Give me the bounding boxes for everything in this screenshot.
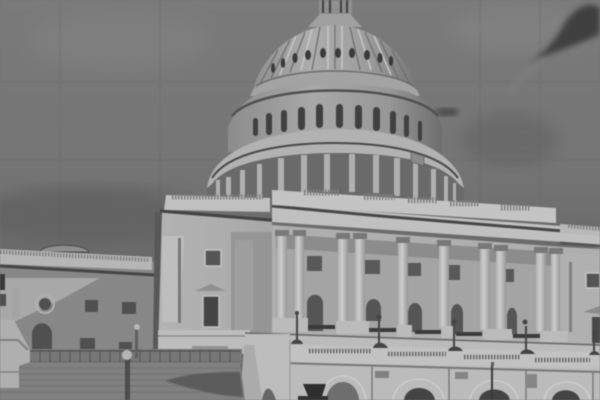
portico recess bbox=[276, 234, 556, 338]
wing cornice bbox=[0, 266, 155, 275]
dome base band bbox=[250, 69, 420, 96]
steps bbox=[0, 362, 245, 400]
central left balustrade bbox=[164, 195, 270, 212]
dome oval windows bbox=[271, 48, 393, 73]
pilasters bbox=[162, 236, 184, 322]
left edge shadow bbox=[153, 212, 162, 352]
ground floor arches bbox=[320, 362, 593, 400]
dome ribs highlight bbox=[280, 26, 391, 75]
step shadow bbox=[165, 372, 243, 397]
portico windows bbox=[307, 256, 514, 282]
wing pilaster bbox=[12, 288, 20, 318]
portico columns bbox=[272, 230, 568, 342]
portico wall bbox=[272, 225, 600, 350]
wing lit wall bbox=[0, 278, 100, 322]
terrace bbox=[245, 333, 600, 400]
central block left bay bbox=[153, 212, 276, 354]
peristyle ring bbox=[207, 129, 464, 205]
stair lamp post bbox=[122, 324, 140, 400]
right wing wall bbox=[563, 252, 600, 350]
foreground lamp bbox=[298, 384, 328, 400]
wing windows bbox=[0, 294, 136, 364]
entablature bbox=[160, 204, 600, 248]
wing small dome bbox=[40, 245, 89, 252]
right wing balustrade bbox=[560, 224, 600, 236]
dark cloud bbox=[435, 5, 600, 116]
peristyle columns bbox=[216, 154, 456, 203]
iron fence bbox=[30, 349, 242, 364]
foliage at left edge bbox=[0, 274, 5, 290]
left pedestal bbox=[0, 320, 30, 388]
shaded bay bbox=[231, 232, 276, 334]
lower balustrade bbox=[245, 344, 600, 372]
left wing bbox=[0, 245, 170, 364]
flag bbox=[411, 152, 424, 166]
front pier bbox=[240, 334, 290, 400]
upper drum with arched windows bbox=[228, 84, 442, 152]
dome lantern bbox=[308, 0, 362, 27]
terrace lamps bbox=[291, 311, 600, 355]
portico arches bbox=[307, 295, 517, 334]
window pedimented bbox=[203, 296, 219, 327]
main balustrade bbox=[272, 190, 556, 223]
upper dome bbox=[250, 25, 420, 96]
dome ribs bbox=[260, 25, 410, 84]
portico railings bbox=[307, 327, 540, 336]
column capitals bbox=[275, 230, 563, 254]
recess upper shadow bbox=[276, 234, 556, 266]
plinth bbox=[158, 330, 250, 354]
wing balustrade bbox=[0, 249, 152, 270]
window upper bbox=[205, 250, 221, 266]
column plinths bbox=[272, 318, 568, 342]
